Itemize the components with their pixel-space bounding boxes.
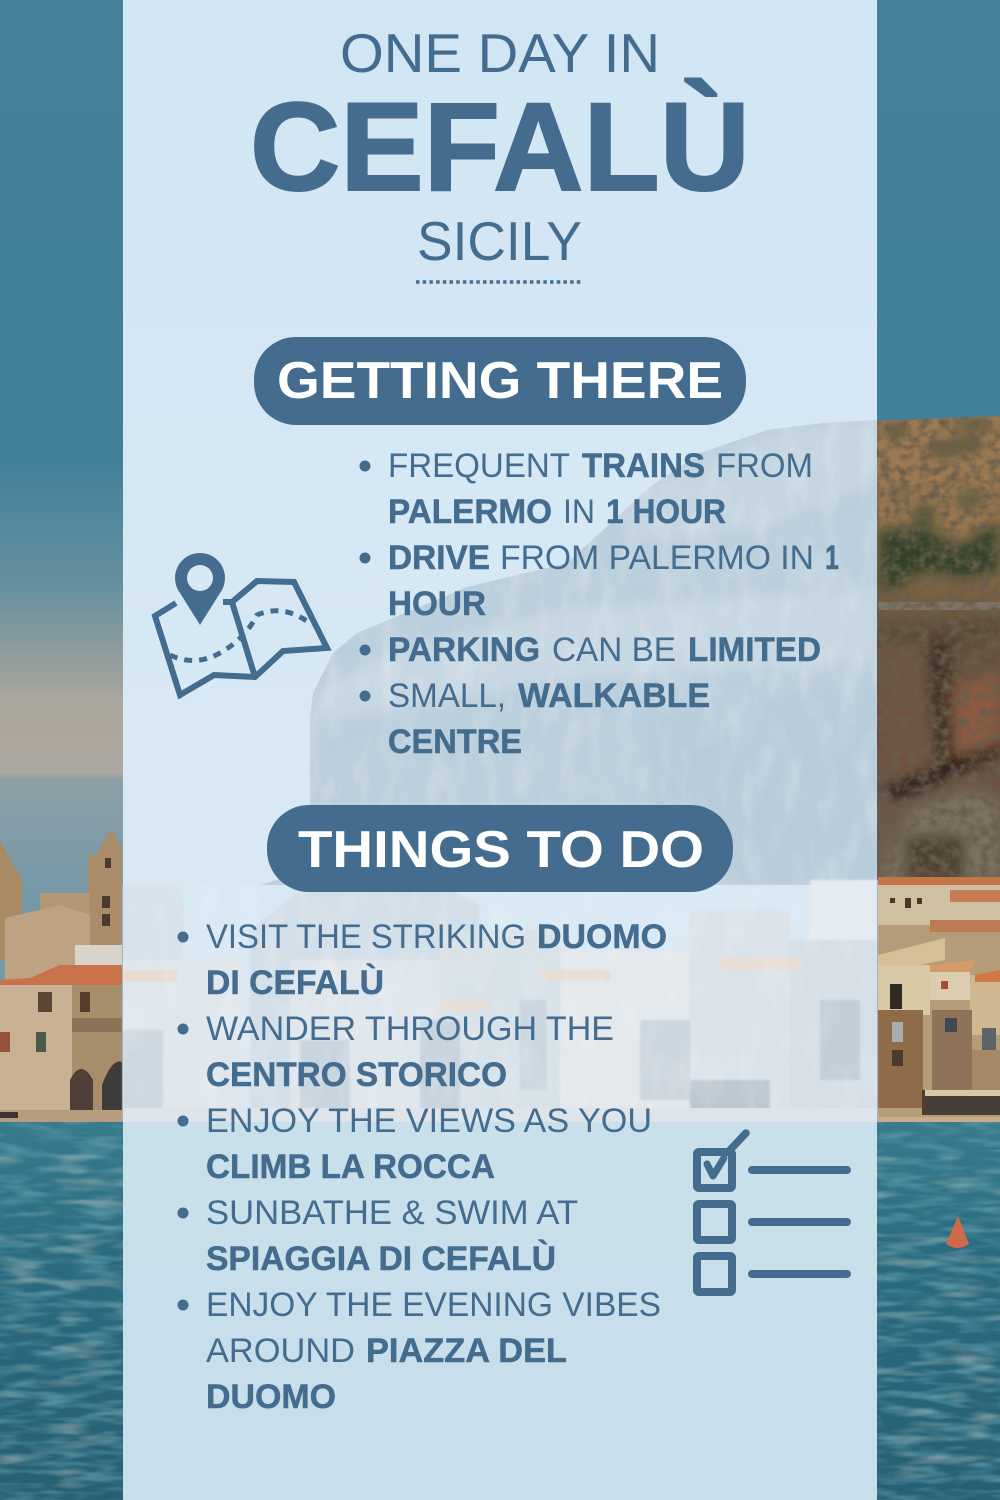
list: things to do: ENJOY THE EVENING VIBES <box>206 1286 661 1324</box>
list: getting there: FREQUENT <box>388 447 570 485</box>
list: things to do: CLIMB LA ROCCA <box>206 1148 495 1186</box>
list: getting there: CAN BE <box>552 631 676 669</box>
list: getting there: CENTRE <box>388 723 522 761</box>
faded town <box>123 880 877 1122</box>
icon: red buoy <box>946 1216 969 1248</box>
heading: things to do: THINGS TO DO <box>298 821 704 879</box>
list: things to do: DI CEFALÙ <box>206 964 384 1002</box>
panel: translucent centre column with faded photo <box>123 0 880 1500</box>
list: things to do: SUNBATHE & SWIM AT <box>206 1194 578 1232</box>
list: things to do: DUOMO <box>206 1378 336 1416</box>
icon: folded map with location pin <box>155 553 327 695</box>
list: getting there: 1 HOUR <box>606 493 726 531</box>
list: things to do: SPIAGGIA DI CEFALÙ <box>206 1240 556 1278</box>
list: things to do: ENJOY THE VIEWS AS YOU <box>206 1102 652 1140</box>
list: getting there: DRIVE <box>388 539 490 577</box>
list: getting there: LIMITED <box>688 631 821 669</box>
town buildings: right <box>878 877 1000 1125</box>
mountain: La Rocca <box>877 416 1000 880</box>
heading: getting there <box>254 337 746 425</box>
faded cliff <box>250 416 880 886</box>
sea <box>0 1122 1000 1500</box>
list: things to do: VISIT THE STRIKING <box>206 918 526 956</box>
title line: Sicily: SICILY <box>417 210 582 272</box>
title line: Cefalù: CEFALÙ <box>250 78 750 217</box>
list: getting there <box>360 447 839 761</box>
list: getting there: SMALL, <box>388 677 506 715</box>
dotted divider <box>416 280 581 284</box>
town buildings: left <box>0 828 122 1122</box>
list: getting there: FROM <box>716 447 813 485</box>
list: getting there: WALKABLE <box>518 677 710 715</box>
list: getting there: FROM PALERMO IN <box>500 539 814 577</box>
list: getting there: PALERMO <box>388 493 552 531</box>
list: getting there: IN <box>563 493 595 531</box>
list: things to do <box>178 918 667 1416</box>
list: things to do: CENTRO STORICO <box>206 1056 507 1094</box>
list: getting there: HOUR <box>388 585 486 623</box>
list: getting there: TRAINS <box>582 447 705 485</box>
list: things to do: DUOMO <box>537 918 667 956</box>
icon: checklist <box>697 1133 847 1292</box>
list: things to do: PIAZZA DEL <box>366 1332 567 1370</box>
title line: one day in: ONE DAY IN <box>340 22 660 84</box>
list: things to do: AROUND <box>206 1332 355 1370</box>
list: getting there: PARKING <box>388 631 540 669</box>
list: getting there: 1 <box>825 539 839 577</box>
heading: getting there: GETTING THERE <box>277 352 723 410</box>
heading: things to do <box>267 805 733 892</box>
title <box>250 22 750 272</box>
list: things to do: WANDER THROUGH THE <box>206 1010 614 1048</box>
background photo: Cefalù seafront <box>0 326 1000 1500</box>
